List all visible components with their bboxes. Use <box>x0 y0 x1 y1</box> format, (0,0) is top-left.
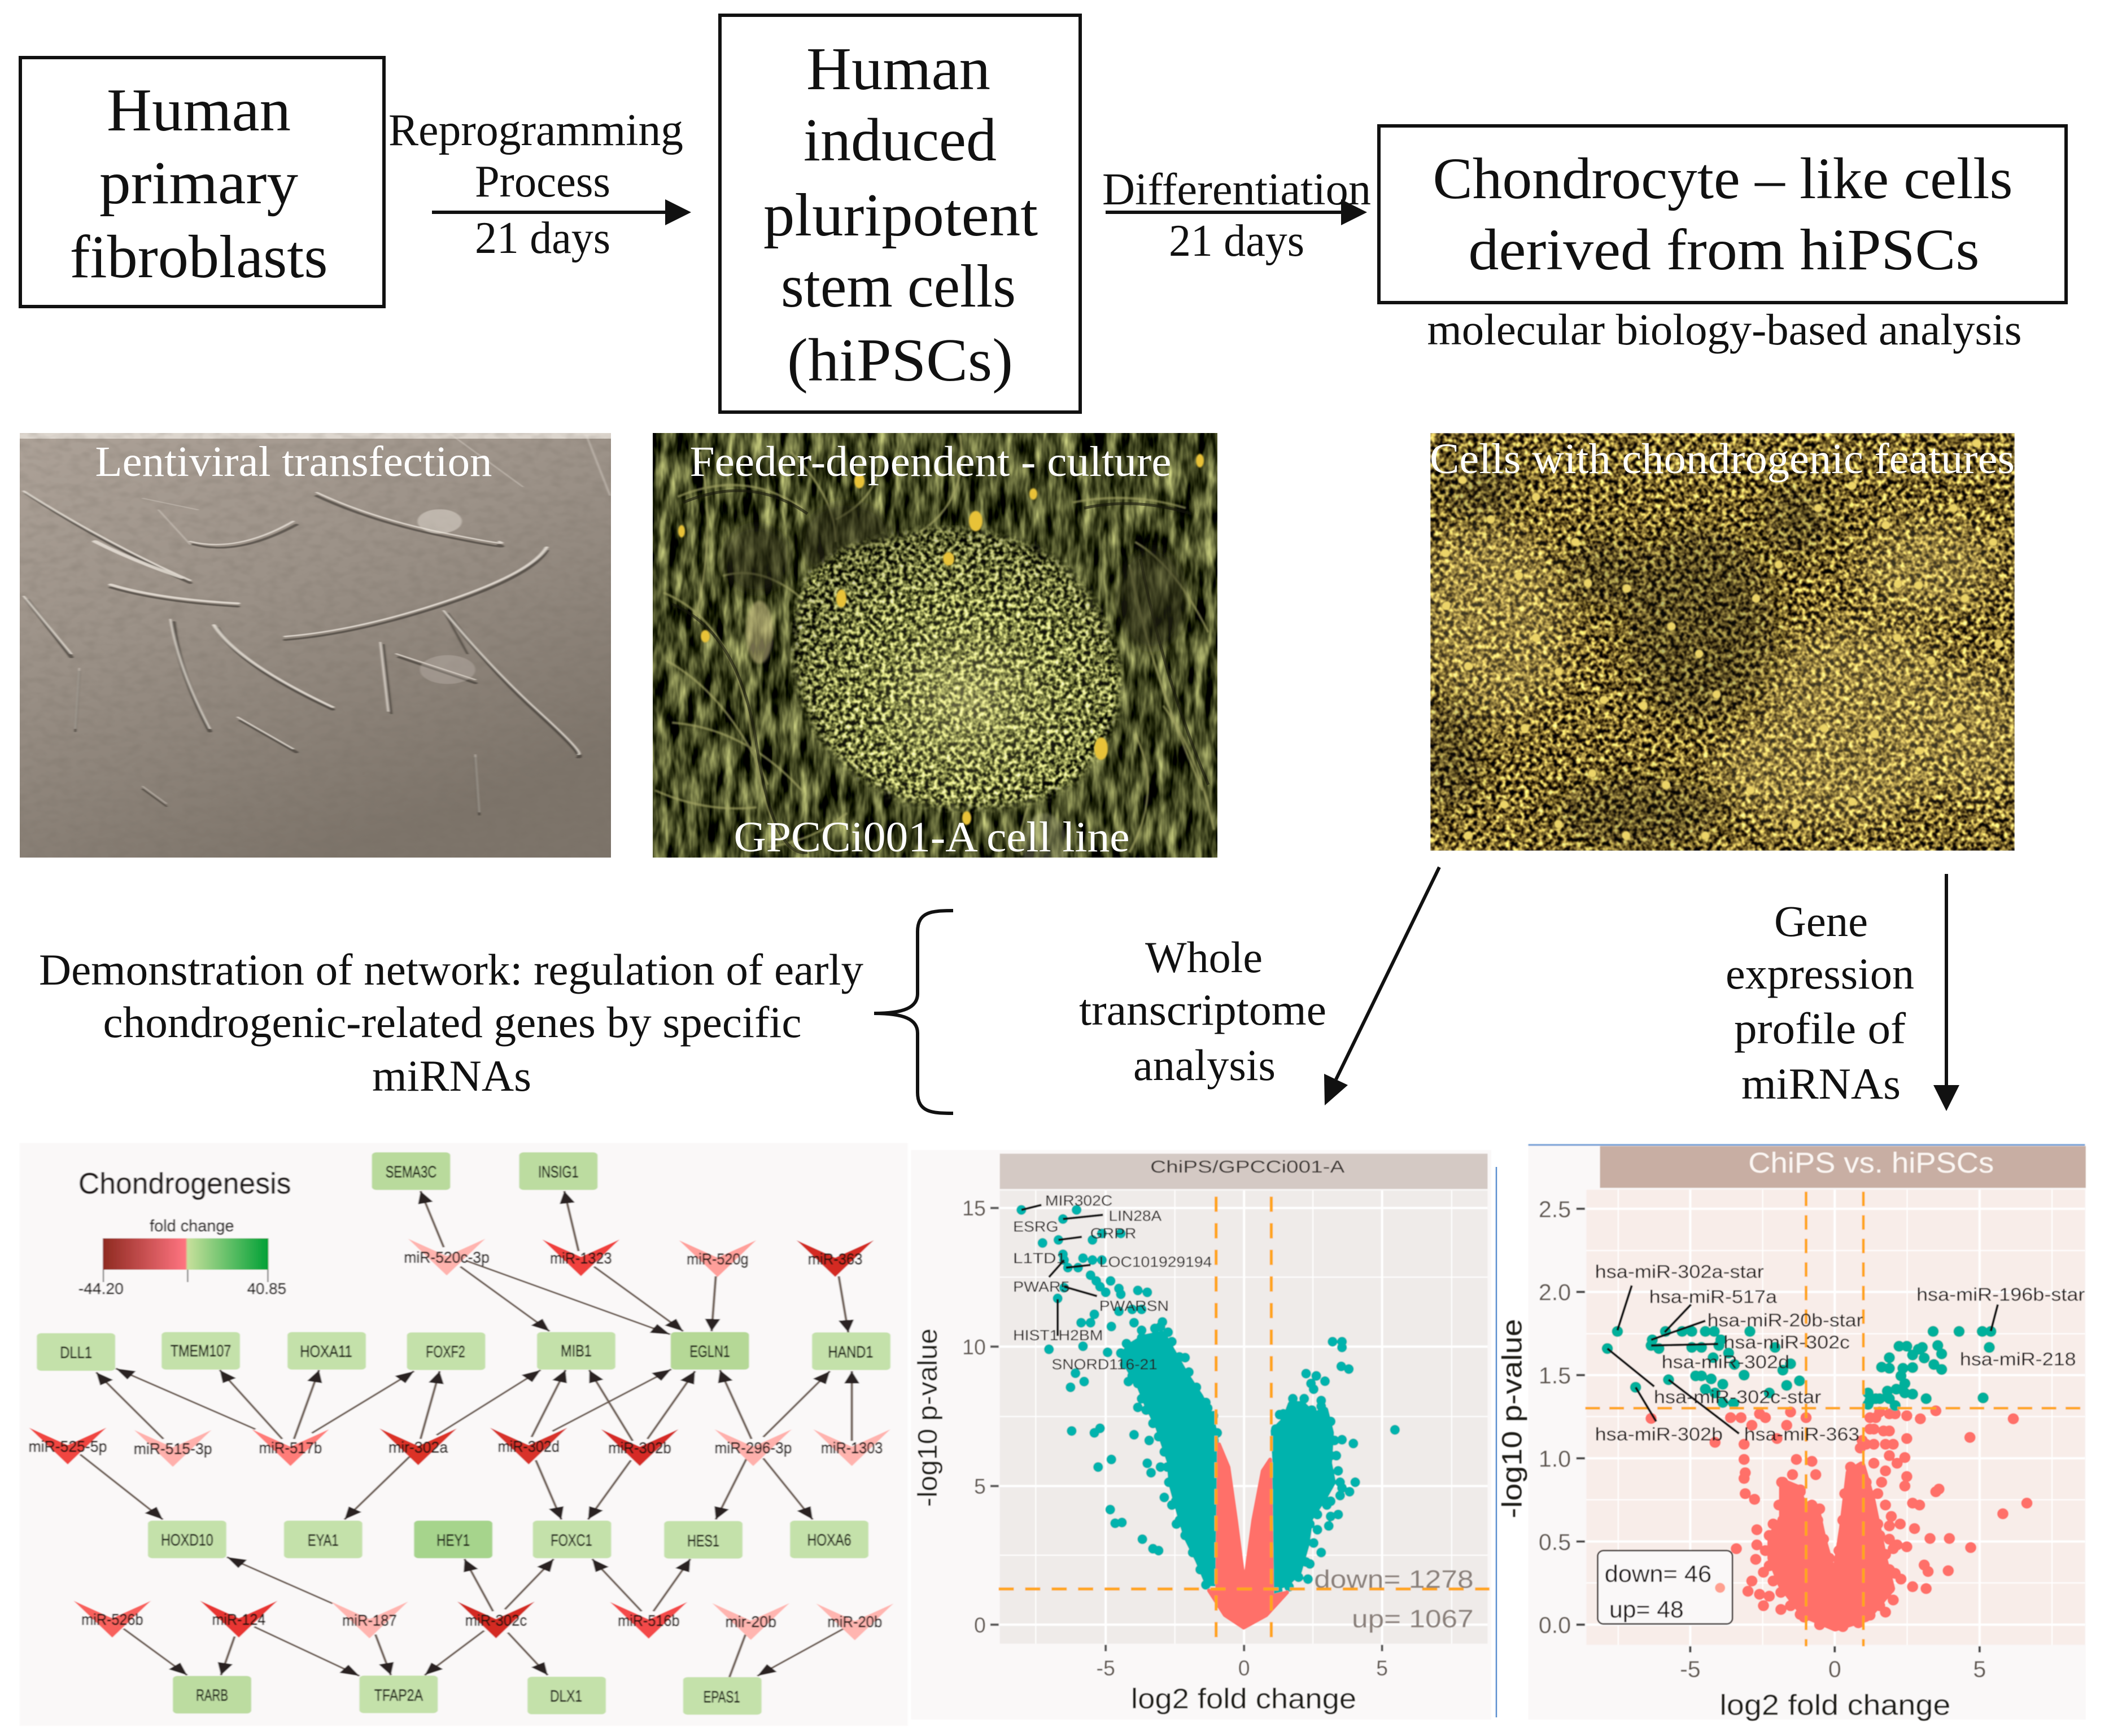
miRNA labels and leaders: hsa-miR-302b <box>1595 1424 1723 1444</box>
miRNA labels: miR-1303 <box>821 1439 883 1457</box>
gene labels: HAND1 <box>828 1343 873 1361</box>
counts: down and up <box>1314 1566 1474 1633</box>
label and arrow: differentiation <box>1102 165 1371 266</box>
arrow: to whole transcriptome analysis <box>1324 867 1439 1105</box>
miRNA labels: miR-526b <box>81 1611 143 1628</box>
axis title: log2 fold change: log2 fold change <box>1131 1683 1356 1715</box>
gene labels and leaders: SNORD116-21 <box>1051 1357 1158 1373</box>
axes and tick labels: 0.5 <box>1539 1529 1571 1555</box>
gene labels and leaders: HIST1H2BM <box>1013 1328 1103 1344</box>
text: whole transcriptome analysis <box>1079 933 1326 1090</box>
miRNA labels and leaders: hsa-miR-302a-star <box>1595 1261 1764 1282</box>
miRNA labels: miR-296-3p <box>715 1439 792 1457</box>
axes and tick labels: 2.5 <box>1539 1196 1571 1222</box>
text: demonstration of network: miRNAs <box>372 1051 531 1100</box>
network edges <box>80 1191 852 1677</box>
gene labels: FOXF2 <box>426 1343 465 1361</box>
miRNA labels and leaders: hsa-miR-302c-star <box>1654 1387 1821 1407</box>
panel: volcano plot ChiPS vs. hiPSCs <box>1497 1145 2086 1721</box>
gene labels and leaders: GRPR <box>1090 1226 1136 1242</box>
gene labels and leaders: PWARSN <box>1099 1298 1169 1314</box>
strip title <box>1600 1146 2086 1188</box>
box: human primary fibroblasts <box>20 58 384 307</box>
miRNA labels and leaders: hsa-miR-302d <box>1662 1352 1789 1372</box>
gene labels: DLX1 <box>550 1687 582 1705</box>
axes and tick labels: 2.0 <box>1539 1280 1571 1305</box>
text: demonstration of network: Demonstration of network: regulation of early <box>39 945 863 994</box>
text: gene expression profile of miRNAs <box>1726 897 1914 1108</box>
gene labels: DLL1 <box>60 1343 92 1362</box>
gene labels: FOXC1 <box>551 1531 592 1549</box>
miRNA labels: miR-20b <box>827 1613 882 1630</box>
axes and tick labels: 5 <box>1973 1656 1986 1682</box>
box: human primary fibroblasts: fibroblasts <box>70 224 328 291</box>
legend: chondrogenesis fold change: 40.85 <box>247 1280 286 1297</box>
box: human induced pluripotent stem cells: stem cells <box>781 253 1016 320</box>
gene labels: RARB <box>196 1686 228 1704</box>
text: gene expression profile of miRNAs: Gene <box>1774 897 1868 946</box>
text: gene expression profile of miRNAs: expression <box>1726 949 1914 998</box>
miRNA labels: miR-517b <box>259 1439 322 1457</box>
gene labels: EGLN1 <box>689 1342 730 1361</box>
caption: lentiviral transfection: Lentiviral transfection <box>95 438 492 486</box>
caption: GPCCi001-A cell line: GPCCi001-A cell line <box>734 814 1129 861</box>
legend: chondrogenesis fold change: fold change <box>150 1217 234 1235</box>
counts: down and up: up= 1067 <box>1352 1605 1474 1633</box>
micrograph: lentiviral transfection fibroblasts <box>20 433 611 858</box>
non-significant points <box>1209 1444 1287 1628</box>
text: gene expression profile of miRNAs: profile of <box>1734 1004 1906 1053</box>
box: human induced pluripotent stem cells: (hiPSCs) <box>787 327 1013 394</box>
label and arrow: reprogramming process: 21 days <box>475 213 610 263</box>
caption: feeder-dependent culture: Feeder-dependent - culture <box>690 438 1171 486</box>
miRNA labels: mir-20b <box>725 1613 776 1630</box>
counts: down and up: down= 1278 <box>1314 1566 1474 1594</box>
axes and tick labels: 1.5 <box>1539 1363 1571 1389</box>
divider line between volcano plots <box>1496 1167 1497 1717</box>
axis title: -log10 p-value: -log10 p-value <box>1497 1319 1527 1518</box>
plot background and grid <box>1587 1190 2085 1645</box>
miRNA labels: miR-302d <box>498 1438 560 1455</box>
axes and tick labels: 5 <box>974 1475 986 1498</box>
text: demonstration of network <box>39 945 863 1100</box>
counts box: down and up: down= 46 <box>1605 1560 1711 1587</box>
miRNA labels: miR-124 <box>212 1611 265 1628</box>
label and arrow: reprogramming process <box>388 106 691 263</box>
axis title: -log10 p-value: -log10 p-value <box>912 1328 943 1507</box>
caption: cells with chondrogenic features: Cells with chondrogenic features <box>1430 435 2015 483</box>
box: human primary fibroblasts: primary <box>99 150 298 217</box>
miRNA labels: miR-520g <box>687 1250 749 1268</box>
axes and tick labels: 0 <box>1238 1656 1250 1680</box>
gene labels and leaders: ESRG <box>1013 1219 1058 1235</box>
plot background and grid <box>1000 1191 1487 1643</box>
axes and tick labels: 5 <box>1376 1656 1388 1680</box>
threshold lines <box>999 1197 1490 1646</box>
micrograph: cells with chondrogenic features <box>1421 433 2021 851</box>
miRNA labels and leaders: hsa-miR-517a <box>1649 1286 1778 1307</box>
miRNA labels and leaders: hsa-miR-218 <box>1960 1349 2076 1369</box>
text: whole transcriptome analysis: Whole <box>1145 933 1263 982</box>
non-significant points <box>1651 1411 2027 1628</box>
counts box: down and up <box>1597 1551 1732 1624</box>
gene labels and leaders: PWAR5 <box>1013 1279 1070 1295</box>
box: human primary fibroblasts: Human <box>107 77 291 144</box>
axes and tick labels <box>1539 1196 1986 1682</box>
miRNA labels: miR-302c <box>465 1612 527 1629</box>
panel: volcano plot ChiPS/GPCCi001-A <box>911 1150 1491 1720</box>
axes and tick labels <box>962 1196 1388 1680</box>
label and arrow: differentiation: Differentiation <box>1102 165 1371 215</box>
text: gene expression profile of miRNAs: miRNAs <box>1741 1059 1901 1108</box>
box: human induced pluripotent stem cells: induced <box>804 107 997 174</box>
panel: chondrogenesis miRNA-gene network <box>20 1143 907 1726</box>
miRNA labels <box>28 1249 883 1630</box>
axes and tick labels: 0.0 <box>1539 1612 1571 1638</box>
gene nodes <box>37 1152 890 1715</box>
miRNA labels: miR-515-3p <box>134 1440 212 1458</box>
gene labels and leaders: LIN28A <box>1109 1209 1162 1225</box>
gene labels and leaders: LOC101929194 <box>1099 1254 1212 1270</box>
gene labels and leaders: MIR302C <box>1045 1193 1112 1209</box>
brace <box>874 911 953 1113</box>
strip title <box>1000 1154 1487 1189</box>
box: human induced pluripotent stem cells: Human <box>806 36 990 103</box>
text: whole transcriptome analysis: transcriptome <box>1079 985 1326 1034</box>
axes and tick labels: 0 <box>1828 1656 1841 1682</box>
miRNA labels: miR-363 <box>808 1250 863 1268</box>
gene labels <box>60 1162 873 1706</box>
label and arrow: differentiation: 21 days <box>1169 216 1304 266</box>
miRNA labels: miR-525-5p <box>28 1438 107 1455</box>
box: chondrocyte-like cells: Chondrocyte – like cells <box>1433 146 2012 211</box>
miRNA labels: miR-1323 <box>550 1249 612 1267</box>
miRNA labels: miR-520c-3p <box>404 1249 490 1266</box>
gene labels: MIB1 <box>561 1341 592 1360</box>
axes and tick labels: 1.0 <box>1539 1446 1571 1472</box>
significant points <box>1021 1210 1395 1590</box>
box: human induced pluripotent stem cells <box>720 15 1080 412</box>
arrow: to gene expression profile <box>1933 874 1959 1111</box>
miRNA labels and leaders <box>1595 1261 2085 1444</box>
axis title: log2 fold change: log2 fold change <box>1720 1689 1950 1721</box>
significant points <box>1608 1331 1991 1406</box>
strip title: ChiPS vs. hiPSCs <box>1748 1147 1994 1179</box>
gene labels and leaders <box>1013 1193 1212 1373</box>
threshold lines <box>1585 1192 2086 1646</box>
axes and tick labels: 10 <box>962 1335 986 1359</box>
axes and tick labels: -5 <box>1680 1656 1701 1682</box>
miRNA nodes <box>29 1239 893 1641</box>
gene labels: HOXD10 <box>161 1531 213 1549</box>
label and arrow: reprogramming process: Process <box>475 157 610 207</box>
box: chondrocyte-like cells: derived from hiPSCs <box>1468 217 1980 282</box>
miRNA labels and leaders: hsa-miR-196b-star <box>1916 1284 2085 1305</box>
gene labels: EPAS1 <box>704 1687 740 1706</box>
miRNA labels: miR-187 <box>342 1612 397 1629</box>
gene labels: TMEM107 <box>171 1341 231 1360</box>
box: chondrocyte-like cells <box>1379 126 2066 303</box>
gene labels and leaders: L1TD1 <box>1013 1250 1066 1266</box>
miRNA labels and leaders: hsa-miR-363 <box>1744 1424 1859 1444</box>
gene labels: HOXA6 <box>807 1531 852 1549</box>
counts box: down and up: up= 48 <box>1609 1596 1684 1623</box>
gene labels: HEY1 <box>436 1531 470 1549</box>
caption: molecular biology-based analysis: molecular biology-based analysis <box>1427 305 2021 354</box>
text: whole transcriptome analysis: analysis <box>1133 1040 1276 1090</box>
text: demonstration of network: chondrogenic-related genes by specific <box>103 998 802 1047</box>
gene labels: INSIG1 <box>538 1162 579 1181</box>
micrograph: feeder-dependent colony <box>653 433 1217 881</box>
legend: chondrogenesis fold change: Chondrogenesis <box>78 1167 291 1200</box>
label and arrow: reprogramming process: Reprogramming <box>388 106 683 155</box>
gene labels: HES1 <box>687 1532 719 1550</box>
miRNA labels: mir-302a <box>388 1438 448 1456</box>
axes and tick labels: 15 <box>962 1196 986 1220</box>
miRNA labels: miR-516b <box>618 1612 679 1629</box>
miRNA labels and leaders: hsa-miR-302c <box>1723 1332 1850 1353</box>
axes and tick labels: 0 <box>974 1613 986 1637</box>
box: human induced pluripotent stem cells: pluripotent <box>763 182 1038 249</box>
legend: chondrogenesis fold change <box>78 1167 291 1297</box>
miRNA labels and leaders: hsa-miR-20b-star <box>1708 1310 1863 1331</box>
miRNA labels: miR-302b <box>608 1439 671 1457</box>
gene labels: EYA1 <box>308 1531 339 1549</box>
gene labels: SEMA3C <box>386 1162 436 1181</box>
legend: chondrogenesis fold change: -44.20 <box>78 1280 124 1297</box>
gene labels: TFAP2A <box>374 1686 423 1704</box>
gene labels: HOXA11 <box>300 1342 352 1361</box>
axes and tick labels: -5 <box>1096 1656 1115 1680</box>
strip title: ChiPS/GPCCi001-A <box>1150 1157 1345 1177</box>
